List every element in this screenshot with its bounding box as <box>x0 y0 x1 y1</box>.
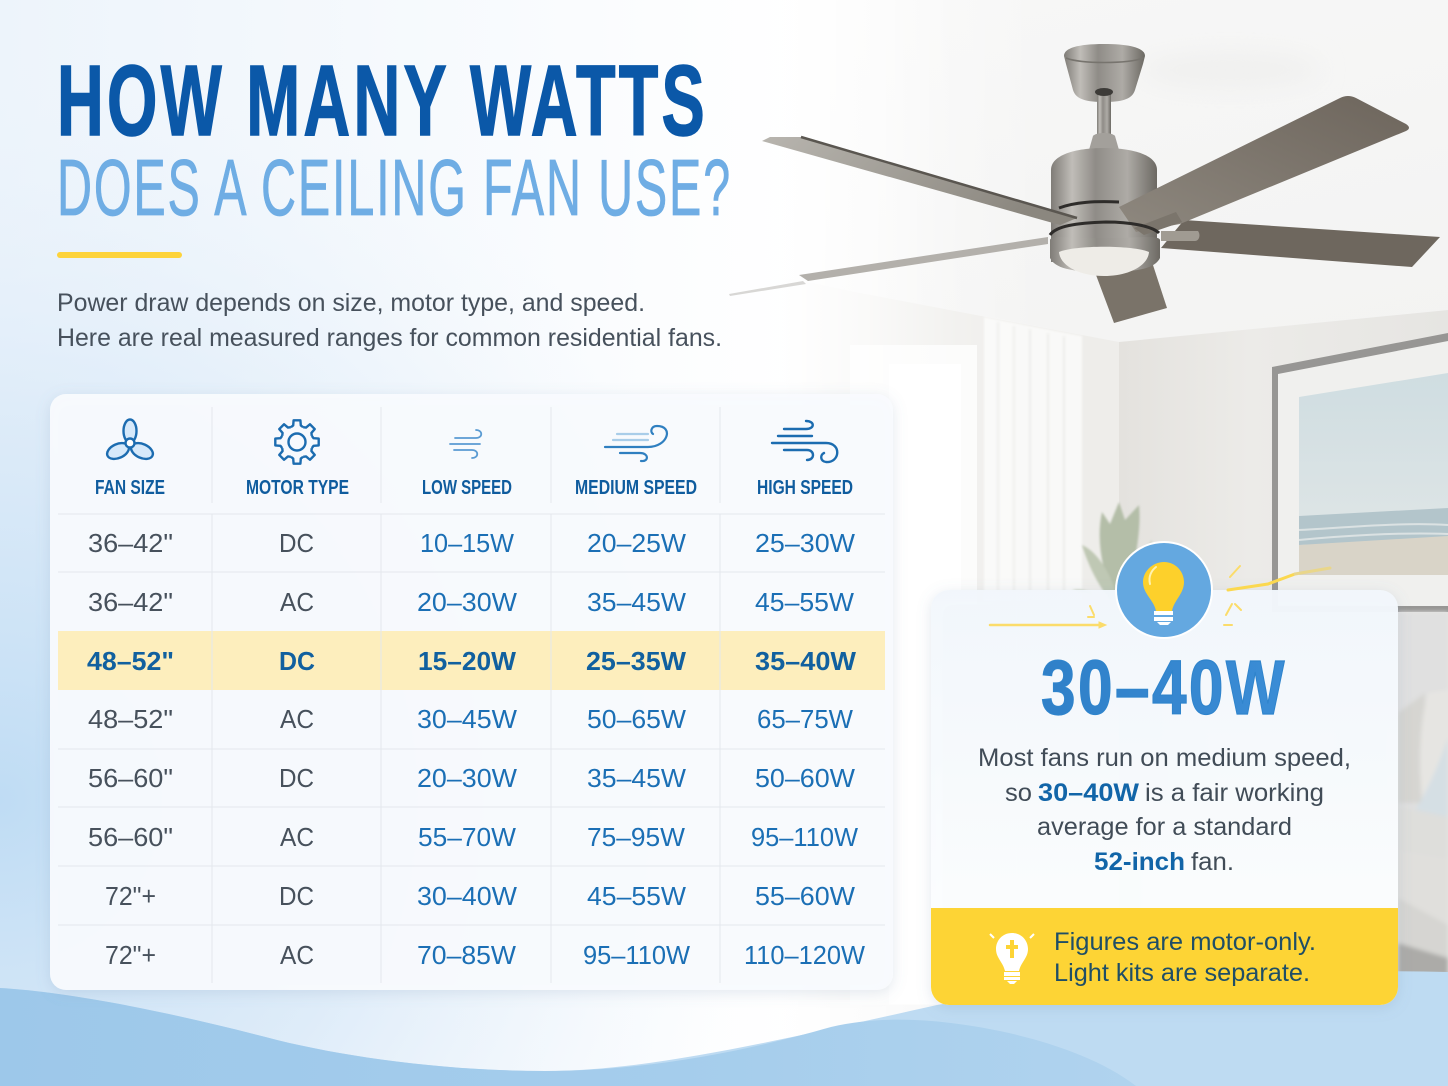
icon: motor gear <box>275 420 319 464</box>
row: 72+ AC: AC <box>280 942 314 970</box>
icon: high speed wind <box>772 421 837 462</box>
row: 72+ AC: 70–85W <box>417 942 516 970</box>
right wall <box>1119 310 1448 1000</box>
icon: medium speed wind <box>605 426 667 461</box>
row: 72+ DC <box>105 883 855 911</box>
row: 36-42 DC: DC <box>279 530 314 558</box>
lower motor ring and light <box>1050 202 1160 276</box>
row: 72+ DC: 55–60W <box>755 883 855 911</box>
yellow footer band <box>931 908 1398 1005</box>
row: 48-52 DC highlighted: 35–40W <box>755 648 857 676</box>
row: 72+ DC: DC <box>279 883 314 911</box>
row: 56-60 AC: AC <box>280 824 314 852</box>
row: 36-42 DC: 36–42" <box>88 530 173 558</box>
explanation text: Most fans run on medium speed, <box>978 744 1351 772</box>
row: 56-60 DC: 20–30W <box>417 765 517 793</box>
icon: low speed wind <box>450 430 481 458</box>
table header: LOW SPEED <box>422 477 512 499</box>
ceiling <box>0 0 1448 342</box>
left wall with window <box>600 240 1119 1005</box>
row: 72+ AC: 95–110W <box>583 942 690 970</box>
panel: average callout card <box>931 542 1398 1005</box>
row: 72+ AC <box>105 942 865 970</box>
row: 48-52 AC: 50–65W <box>587 706 686 734</box>
canopy <box>1064 44 1145 138</box>
table header: MEDIUM SPEED <box>575 477 697 499</box>
panel: wattage table <box>50 394 893 990</box>
row: 36-42 DC: 10–15W <box>420 530 514 558</box>
row: 72+ DC: 45–55W <box>587 883 686 911</box>
bottom waves <box>0 971 1448 1086</box>
row: 56-60 AC: 56–60" <box>88 824 173 852</box>
row: 56-60 AC: 55–70W <box>418 824 516 852</box>
yellow accent bar <box>57 252 182 258</box>
row: 56-60 AC: 95–110W <box>751 824 858 852</box>
title: DOES A CEILING FAN USE? <box>57 143 732 232</box>
row: 72+ AC: 110–120W <box>744 942 865 970</box>
row: 48-52 AC: 30–45W <box>417 706 517 734</box>
explanation text: 30–40W <box>1038 779 1139 807</box>
row: 56-60 AC: 75–95W <box>587 824 685 852</box>
row: 36-42 DC <box>88 530 855 558</box>
row: 56-60 DC: 35–45W <box>587 765 686 793</box>
intro text <box>57 289 722 352</box>
intro text: Here are real measured ranges for common residential fans. <box>57 324 722 352</box>
row: 36-42 DC: 25–30W <box>755 530 855 558</box>
row: 48-52 AC: 48–52" <box>88 706 173 734</box>
yellow footer band: Light kits are separate. <box>1054 959 1310 987</box>
row: 56-60 AC <box>88 824 858 852</box>
row: 36-42 DC: 20–25W <box>587 530 686 558</box>
row: 36-42 AC: 45–55W <box>755 589 854 617</box>
curtain <box>984 317 1082 600</box>
explanation text: fan. <box>1191 848 1234 876</box>
row: 36-42 AC: 20–30W <box>417 589 517 617</box>
row: 48-52 DC highlighted: DC <box>279 648 315 676</box>
front blades <box>762 96 1409 235</box>
plant <box>1072 502 1152 600</box>
ceiling fan <box>729 44 1440 323</box>
rear blades <box>729 220 1440 323</box>
explanation text: is a fair working <box>1145 779 1324 807</box>
intro text: Power draw depends on size, motor type, and speed. <box>57 289 645 317</box>
icon: light bulb badge <box>1116 542 1212 638</box>
title: HOW MANY WATTS <box>57 45 708 157</box>
row: 56-60 DC: 50–60W <box>755 765 855 793</box>
row: 56-60 DC <box>88 765 855 793</box>
big number: 30–40W <box>1041 645 1287 731</box>
table header: HIGH SPEED <box>757 477 853 499</box>
row: 48-52 AC <box>88 706 853 734</box>
explanation text: so <box>1005 779 1032 807</box>
title <box>57 45 732 232</box>
row: 48-52 AC: AC <box>280 706 314 734</box>
row: 48-52 DC highlighted <box>87 648 857 676</box>
explanation text <box>978 744 1351 876</box>
explanation text: average for a standard <box>1037 813 1292 841</box>
table header: FAN SIZE <box>95 477 165 499</box>
row: 56-60 DC: 56–60" <box>88 765 173 793</box>
row: 72+ DC: 30–40W <box>417 883 517 911</box>
row: 72+ DC: 72"+ <box>105 883 156 911</box>
yellow accent streaks <box>990 566 1330 628</box>
row: 48-52 DC highlighted: 15–20W <box>418 648 517 676</box>
icon: fan size <box>105 420 155 462</box>
row: 36-42 AC: AC <box>280 589 314 617</box>
sofa <box>1398 612 1448 980</box>
row: 36-42 AC <box>88 589 854 617</box>
table header <box>95 420 853 499</box>
explanation text: 52-inch <box>1094 848 1185 876</box>
framed beach picture <box>1272 333 1448 612</box>
ceiling shadow by canopy <box>1140 52 1320 88</box>
row: 48-52 DC highlighted: 25–35W <box>586 648 687 676</box>
highlighted row background <box>58 631 885 690</box>
row: 72+ AC: 72"+ <box>105 942 156 970</box>
icon: white bulb <box>990 933 1034 984</box>
row: 36-42 AC: 35–45W <box>587 589 686 617</box>
row: 56-60 DC: DC <box>279 765 314 793</box>
row: 48-52 AC: 65–75W <box>757 706 853 734</box>
motor housing <box>1051 133 1157 262</box>
row: 36-42 AC: 36–42" <box>88 589 173 617</box>
yellow footer band: Figures are motor-only. <box>1054 928 1316 956</box>
table header: MOTOR TYPE <box>246 477 349 499</box>
row: 48-52 DC highlighted: 48–52" <box>87 648 174 676</box>
